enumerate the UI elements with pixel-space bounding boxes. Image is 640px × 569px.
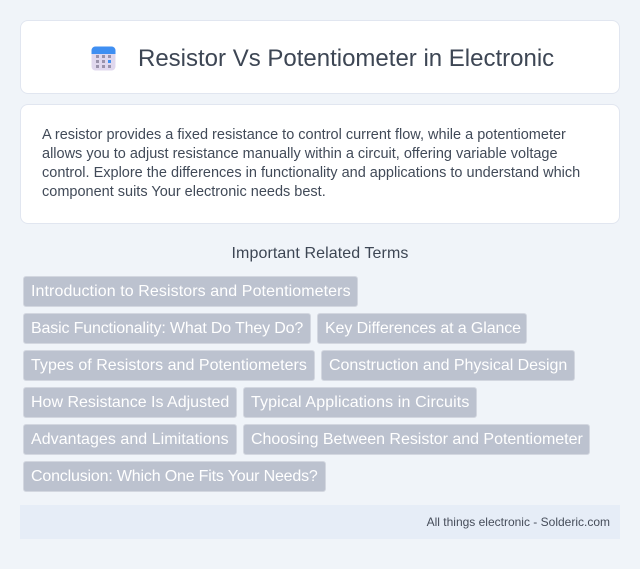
description text: A resistor provides a fixed resistance to control current flow, while a potentiometer bbox=[42, 127, 566, 143]
icon: calendar bbox=[92, 46, 116, 70]
tag: Typical Applications in Circuits bbox=[251, 394, 469, 411]
tag: How Resistance Is Adjusted bbox=[31, 394, 229, 411]
footer credit: All things electronic - Solderic.com bbox=[427, 515, 610, 529]
tag bbox=[243, 387, 477, 418]
tag bbox=[23, 276, 358, 307]
tag: Types of Resistors and Potentiometers bbox=[31, 357, 307, 374]
tag: Basic Functionality: What Do They Do? bbox=[31, 320, 303, 337]
tag: Key Differences at a Glance bbox=[325, 320, 521, 337]
tag: Advantages and Limitations bbox=[31, 431, 229, 448]
tag bbox=[23, 313, 311, 344]
description text: allows you to adjust resistance manually within a circuit, offering variable voltage bbox=[42, 146, 558, 162]
tag bbox=[23, 350, 315, 381]
tag bbox=[243, 424, 590, 455]
tag: Construction and Physical Design bbox=[329, 357, 567, 374]
footer bar bbox=[20, 505, 620, 539]
description text: component suits Your electronic needs best. bbox=[42, 184, 326, 200]
description text bbox=[42, 127, 580, 200]
panel: description bbox=[20, 104, 620, 224]
heading: important related terms: Important Related Terms bbox=[232, 245, 408, 262]
tag list bbox=[23, 276, 590, 492]
tag bbox=[23, 424, 237, 455]
tag: Choosing Between Resistor and Potentiometer bbox=[251, 431, 583, 448]
tag bbox=[321, 350, 575, 381]
title: Resistor Vs Potentiometer in Electronic bbox=[138, 45, 554, 72]
tag: Introduction to Resistors and Potentiometers bbox=[31, 283, 351, 300]
tag bbox=[317, 313, 527, 344]
tag bbox=[23, 461, 326, 492]
header panel bbox=[20, 20, 620, 94]
tag: Conclusion: Which One Fits Your Needs? bbox=[31, 468, 318, 485]
description text: control. Explore the differences in functionality and applications to understand which bbox=[42, 165, 580, 181]
tag bbox=[23, 387, 237, 418]
